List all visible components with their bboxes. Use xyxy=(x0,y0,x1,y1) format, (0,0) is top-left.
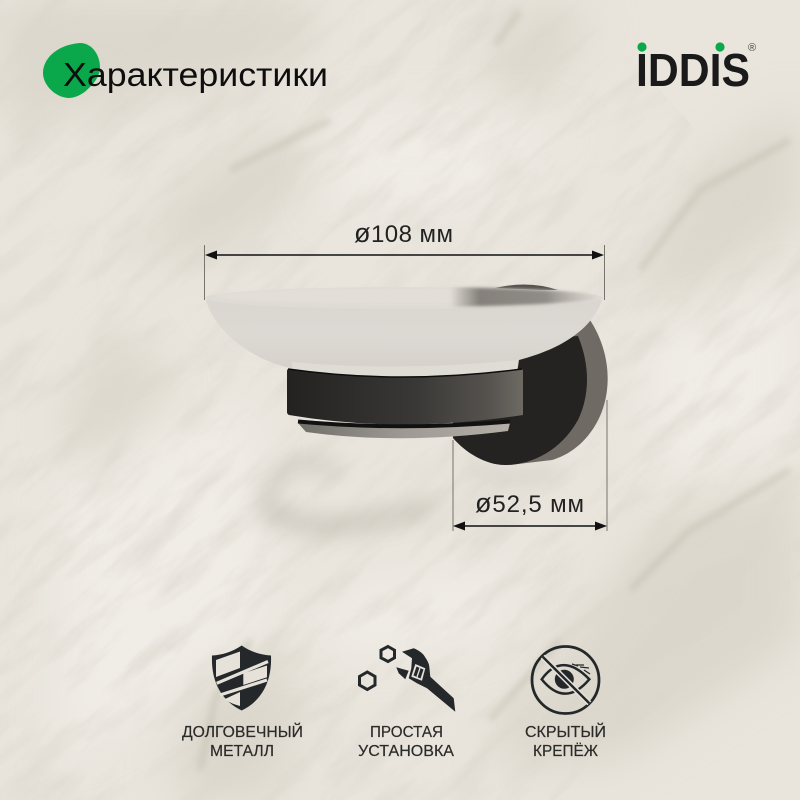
metal holder ring xyxy=(287,369,523,424)
icon: shield xyxy=(212,646,271,710)
feature: easy installation xyxy=(358,646,455,760)
dimension: 108 mm xyxy=(204,218,604,300)
label xyxy=(358,724,454,760)
label: МЕТАЛЛ xyxy=(210,743,274,760)
logo: IDDIS: IDDIS xyxy=(636,44,750,96)
holder base xyxy=(298,422,510,438)
feature: hidden fastening xyxy=(525,646,606,760)
logo: IDDIS: ® xyxy=(748,42,756,54)
title: Характеристики xyxy=(63,56,328,93)
glass foot xyxy=(292,360,518,380)
label xyxy=(525,722,606,760)
label: СКРЫТЫЙ xyxy=(525,722,606,741)
dimension: 52.5 mm xyxy=(453,400,607,531)
label: ПРОСТАЯ xyxy=(370,724,443,741)
label: КРЕПЁЖ xyxy=(533,742,598,760)
wall disc xyxy=(453,284,608,465)
dimension: 52.5 mm: ø52,5 мм xyxy=(475,488,584,518)
feature: durable metal xyxy=(182,646,303,760)
dimension: 108 mm: ø108 мм xyxy=(354,218,453,248)
glass rim xyxy=(205,287,603,309)
product: soap dish xyxy=(205,284,608,526)
label xyxy=(182,722,303,760)
label: УСТАНОВКА xyxy=(358,743,454,760)
icon: crossed-out eye xyxy=(532,646,599,714)
icon: wrench and nuts xyxy=(360,646,455,712)
glass bowl xyxy=(206,300,602,380)
title blob xyxy=(43,43,100,98)
soft shadow xyxy=(262,464,560,526)
label: ДОЛГОВЕЧНЫЙ xyxy=(182,722,303,741)
